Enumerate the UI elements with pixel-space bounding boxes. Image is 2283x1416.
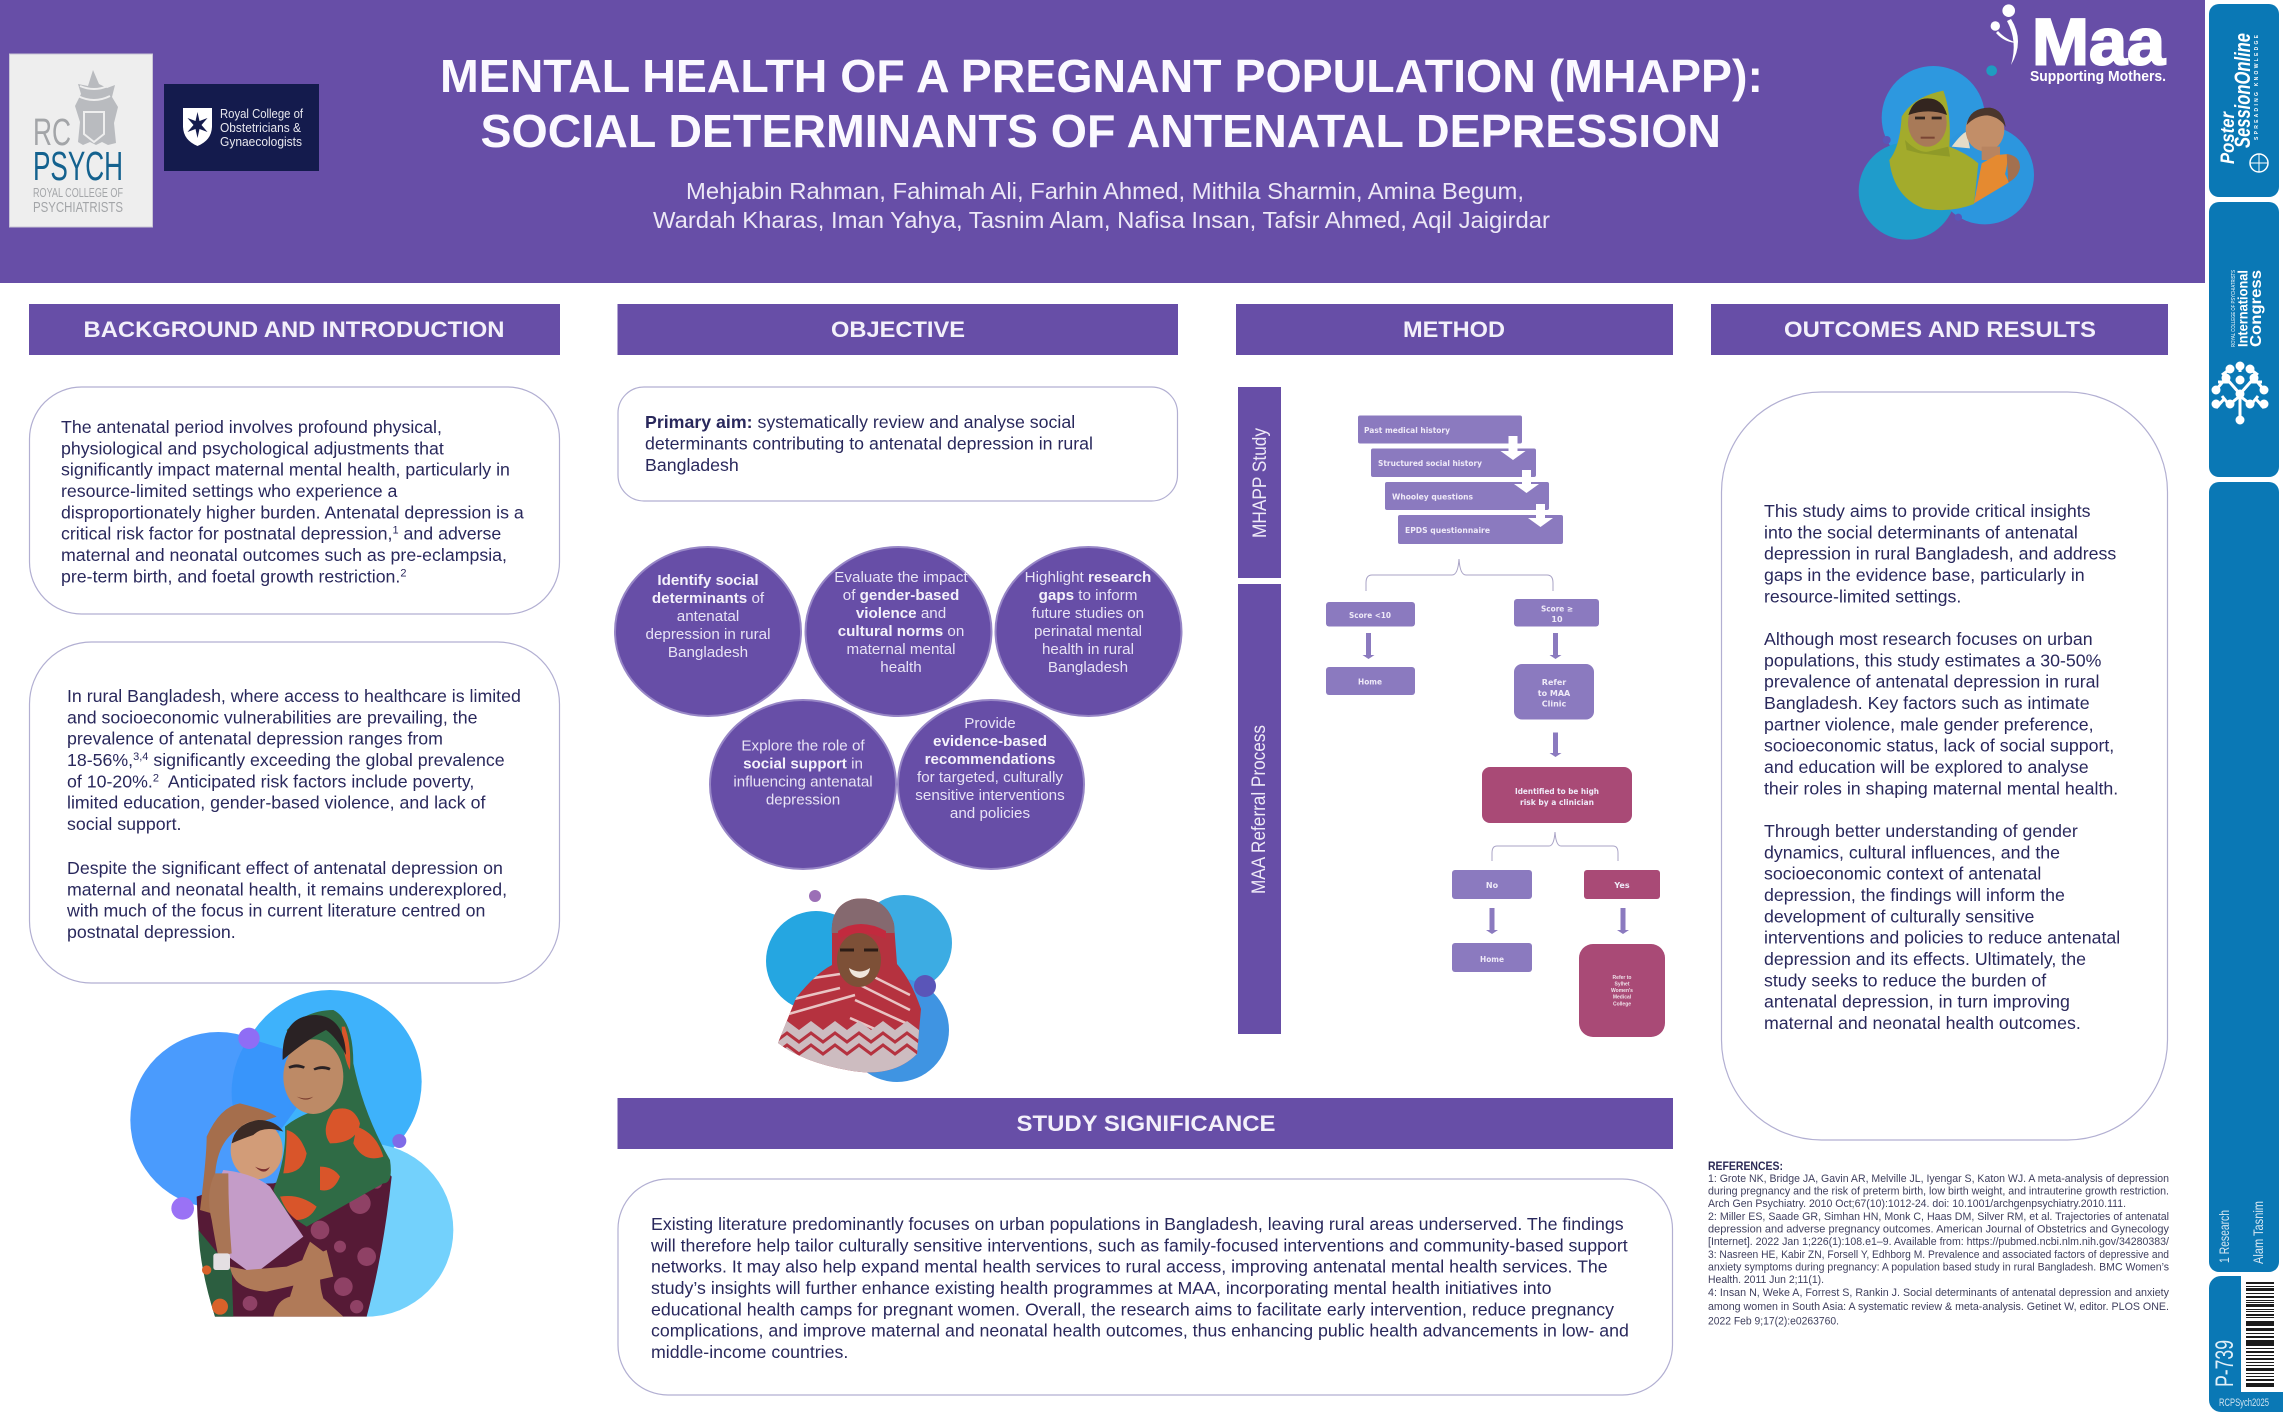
heading: method: METHOD [1403,317,1505,342]
text panel: significance: complications, and improve maternal and neonatal health outcomes, thus enhancing public health advancements in low- and [651,1321,1629,1341]
text panel: rural Bangladesh: Anticipated risk factors include poverty, [159,771,474,791]
heading: method [1236,304,1673,355]
text panel: rural Bangladesh: Despite the significant effect of antenatal depression on [67,858,503,878]
circle: highlight research gaps: to inform [1074,587,1137,604]
text panel: outcomes: into the social determinants of antenatal [1764,522,2078,542]
authors: Wardah Kharas, Iman Yahya, Tasnim Alam, Nafisa Insan, Tafsir Ahmed, Aqil Jaigirdar [653,207,1550,233]
tab: category and author: Alam Tasnim [2250,1201,2266,1264]
side label: MAA referral process [1238,584,1281,1034]
tab: poster number and barcode [2209,1276,2283,1412]
step: identified high risk [1482,767,1632,823]
step: past medical history: Past medical history [1364,426,1451,435]
circle: highlight research gaps: Bangladesh [1048,659,1128,676]
text panel: outcomes: prevalence of antenatal depression in rural [1764,672,2100,692]
heading: outcomes and results [1711,304,2168,355]
text panel: outcomes: development of culturally sensitive [1764,906,2034,926]
title: MENTAL HEALTH OF A PREGNANT POPULATION (MHAPP): [440,50,1763,102]
circle: provide recommendations: recommendations [925,751,1055,768]
step: home [1452,943,1532,972]
step: refer to Sylhet Women's Medical College: College [1613,1002,1631,1008]
tab: Poster Session Online: SPREADING KNOWLEDGE [2254,34,2260,140]
step: refer to Sylhet Women's Medical College: Medical [1613,994,1632,1000]
circle: evaluate the impact: Evaluate the impact [834,569,968,586]
tab: poster number and barcode: P-739 [2211,1340,2239,1387]
tab: Poster Session Online: Poster [2218,111,2239,164]
logo: Royal College of Psychiatrists: PSYCH [33,143,123,189]
step: score under 10: Score <10 [1349,611,1391,620]
text panel: rural Bangladesh: social support. [67,814,181,834]
text panel: significance: Existing literature predominantly focuses on urban populations in Bangladesh, leaving rural areas underserved. The findings [651,1214,1624,1234]
text panel: significance: networks. It may also help expand mental health services to rural access, improving antenatal mental health services. The [651,1257,1608,1277]
text panel: antenatal period: pre-term birth, and foetal growth restriction. [61,566,400,586]
circle: identify social determinants [615,547,801,716]
text panel: outcomes: Through better understanding of gender [1764,821,2078,841]
step: identified high risk: risk by a clinician [1520,798,1594,807]
heading: objective: OBJECTIVE [831,317,965,342]
authors [653,178,1550,233]
circle: evaluate the impact: gender-based [860,587,959,604]
tab: Poster Session Online [2209,4,2279,197]
text panel: primary aim: systematically review and analyse social [753,412,1075,432]
text panel: primary aim: Bangladesh [645,455,739,475]
circle: evaluate the impact: and [917,605,946,622]
circle: identify social determinants: determinants [652,590,747,607]
text panel: primary aim: determinants contributing to antenatal depression in rural [645,434,1093,454]
circle: highlight research gaps: health in rural [1042,641,1134,658]
step: score 10 or more [1514,599,1599,626]
circle: evaluate the impact: cultural norms [838,623,943,640]
circle: explore the role of social support [710,700,896,869]
objective circles [615,547,1182,869]
step: refer to MAA clinic [1514,664,1594,720]
step: yes [1584,870,1660,899]
step: home [1326,667,1415,695]
step: EPDS questionnaire [1398,515,1563,544]
text panel: outcomes [1722,392,2168,1140]
text panel: outcomes: dynamics, cultural influences, and the [1764,842,2060,862]
step: refer to Sylhet Women's Medical College: Women's [1611,988,1633,994]
side label: MAA referral process: MAA Referral Process [1249,725,1270,894]
text panel: outcomes: interventions and policies to reduce antenatal [1764,928,2120,948]
text panel: significance: study’s insights will further enhance existing health programmes at MAA, incorporating mental health initiatives into [651,1278,1552,1298]
tab: category and author [2209,482,2279,1272]
text panel: outcomes: study seeks to reduce the burden of [1764,970,2046,990]
references: 2022 Feb 9;17(2):e0263760. [1708,1316,1839,1328]
text panel: outcomes: This study aims to provide critical insights [1764,501,2091,521]
section: outcomes and results [1708,304,2170,1328]
title: SOCIAL DETERMINANTS OF ANTENATAL DEPRESSION [480,105,1721,157]
circle: identify social determinants: Bangladesh [668,644,748,661]
logo: Royal College of Obstetricians and Gynaecologists: Gynaecologists [220,135,302,149]
photo: mother and child on blue circles [1859,65,2034,240]
tab: International Congress: ROYAL COLLEGE OF PSYCHIATRISTS [2231,270,2237,347]
text panel: rural Bangladesh: prevalence of antenatal depression ranges from [67,729,443,749]
references: [Internet]. 2022 Jan 1;226(1):108.e1–9. Available from: https://pubmed.ncbi.nlm.nih.gov/34280383/ [1708,1236,2170,1248]
logo: Maa Supporting Mothers: Maa [2032,4,2166,78]
text panel: rural Bangladesh: significantly exceeding the global prevalence [148,750,505,770]
side label: MHAPP study: MHAPP Study [1250,428,1271,538]
circle: identify social determinants: antenatal [677,608,739,625]
step: refer to Sylhet Women's Medical College: Refer to [1613,975,1631,981]
text panel: antenatal period: The antenatal period involves profound physical, [61,417,442,437]
tab: International Congress [2209,202,2279,477]
heading: background and introduction: BACKGROUND AND INTRODUCTION [84,317,504,342]
text panel: rural Bangladesh: with much of the focus in current literature centred on [66,901,485,921]
circle: explore the role of social support: in [847,756,863,772]
logo: Royal College of Obstetricians and Gynaecologists: Obstetricians & [220,121,302,135]
heading: outcomes and results: OUTCOMES AND RESULTS [1784,317,2096,342]
text panel: rural Bangladesh: 3,4 [133,751,148,763]
text panel: significance: will therefore help tailor culturally sensitive interventions, such as family-focused interventions and community-based support [650,1235,1628,1255]
references: Arch Gen Psychiatry. 2010 Oct;67(10):1012-24. doi: 10.1001/archgenpsychiatry.2010.111. [1708,1198,2126,1210]
circle: evaluate the impact: maternal mental [847,641,955,658]
icon: network brain [2213,363,2267,423]
flowchart [1326,416,1665,1037]
circle: explore the role of social support: social support [743,756,847,772]
step: home: Home [1480,955,1505,964]
arrow: yes to referral [1617,908,1629,934]
circle: identify social determinants: of [747,590,765,607]
text panel: rural Bangladesh: postnatal depression. [67,922,236,942]
step: Whooley questions: Whooley questions [1392,492,1473,502]
barcode [2246,1282,2274,1387]
text panel: outcomes: depression and its effects. Ultimately, the [1764,949,2086,969]
text panel: outcomes: socioeconomic context of antenatal [1764,864,2041,884]
text panel: outcomes: Bangladesh. Key factors such as intimate [1764,693,2090,713]
text panel: outcomes: depression in rural Bangladesh, and address [1764,544,2116,564]
side label: MHAPP study [1238,387,1281,578]
step: yes: Yes [1613,881,1630,890]
circle: explore the role of social support: influencing antenatal [733,774,873,790]
section: objective [615,304,1182,1082]
tab: category and author: 1 Research [2216,1210,2232,1263]
references: 3: Nasreen HE, Kabir ZN, Forsell Y, Edhborg M. Prevalence and associated factors of depressive and [1708,1249,2169,1261]
text panel: primary aim [618,387,1178,501]
references: during pregnancy and the risk of preterm birth, low birth weight, and intrauterine growth restriction. [1708,1186,2169,1198]
bracket: score split [1366,559,1553,591]
title [440,50,1763,157]
circle: provide recommendations: for targeted, culturally [917,769,1063,786]
tab: International Congress: International [2234,270,2250,347]
tab: International Congress: Congress [2248,270,2265,347]
step: refer to MAA clinic: Clinic [1542,700,1567,708]
text panel: outcomes: Although most research focuses on urban [1764,629,2093,649]
circle: highlight research gaps: Highlight [1025,569,1088,586]
references: depression and adverse pregnancy outcomes. American Journal of Obstetrics and Gynecology [1708,1224,2169,1236]
circle: evaluate the impact [806,547,992,716]
text panel: antenatal period [30,387,560,614]
text panel: outcomes: depression, the findings will inform the [1764,885,2065,905]
arrow: score 10 to refer [1550,633,1562,659]
logo: Royal College of Obstetricians and Gynaecologists: Royal College of [220,107,303,121]
references: anxiety symptoms during pregnancy: A population based study in rural Bangladesh. BMC Women’s [1708,1262,2169,1274]
text panel: outcomes: gaps in the evidence base, particularly in [1764,565,2085,585]
step: refer to MAA clinic: Refer [1542,678,1566,687]
text panel: outcomes: antenatal depression, in turn improving [1764,992,2070,1012]
text panel: antenatal period: physiological and psychological adjustments that [61,438,444,458]
text panel: antenatal period: maternal and neonatal outcomes such as pre-eclampsia, [61,545,507,565]
text panel: rural Bangladesh: and socioeconomic vulnerabilities are prevailing, the [67,707,478,727]
circle: provide recommendations: sensitive interventions [915,787,1065,804]
authors: Mehjabin Rahman, Fahimah Ali, Farhin Ahmed, Mithila Sharmin, Amina Begum, [686,178,1524,204]
circle: provide recommendations: Provide [964,715,1016,732]
section: background and introduction [29,304,560,1317]
circle: identify social determinants: Identify social [657,572,759,589]
step: refer to MAA clinic: to MAA [1538,689,1571,698]
arrow: clinic to risk [1550,732,1562,757]
text panel: antenatal period: and adverse [399,524,501,544]
step: past medical history [1358,416,1522,444]
step: identified high risk: Identified to be high [1515,787,1599,796]
text panel: outcomes: resource-limited settings. [1764,586,1961,606]
text panel: rural Bangladesh: limited education, gender-based violence, and lack of [67,793,485,813]
circle: identify social determinants: depression in rural [646,626,770,643]
arrow: no to home [1486,908,1498,934]
text panel: antenatal period: critical risk factor for postnatal depression, [61,524,392,544]
circle: highlight research gaps [996,547,1182,716]
text panel: outcomes: their roles in shaping maternal mental health. [1764,778,2118,798]
step: structured social history [1371,448,1536,477]
heading: objective [618,304,1178,355]
references [1708,1161,2170,1328]
heading: study significance [618,1098,1673,1149]
circle: highlight research gaps: future studies on [1032,605,1144,622]
references: 4: Insan N, Weke A, Forrest S, Rankin J. Social determinants of antenatal depression and anxiety [1708,1287,2169,1299]
header banner [0,0,2205,283]
text panel: outcomes: partner violence, male gender preference, [1764,714,2094,734]
text panel: rural Bangladesh: 18-56%, [67,750,133,770]
text panel: rural Bangladesh: maternal and neonatal health, it remains underexplored, [67,879,507,899]
text panel: rural Bangladesh [30,642,560,983]
step: score 10 or more: Score ≥ [1541,604,1573,614]
text panel: antenatal period: 1 [392,525,399,537]
text panel: outcomes: populations, this study estimates a 30-50% [1764,650,2102,670]
references: Health. 2011 Jun 2;11(1). [1708,1274,1824,1286]
text panel: significance: educational health camps for pregnant women. Overall, the research aims to facilitate early intervention, reduce pregnancy [651,1299,1614,1319]
step: score under 10 [1326,602,1415,626]
section: study significance [618,1098,1673,1395]
arrows: white step arrows [1500,436,1553,527]
circle: evaluate the impact: of [843,587,860,604]
text panel: outcomes: and education will be explored to analyse [1764,757,2089,777]
text panel: rural Bangladesh: of 10-20%. [67,771,153,791]
logo: Royal College of Psychiatrists [10,54,152,227]
photo: smiling woman with red scarf on blue circles [766,890,952,1082]
step: no: No [1486,881,1499,890]
section: method [1236,304,1673,1037]
circle: evaluate the impact: health [880,659,922,676]
step: structured social history: Structured social history [1378,459,1483,468]
circle: evaluate the impact: on [943,623,964,640]
logo: Maa Supporting Mothers: Supporting Mothers. [2030,69,2166,85]
text panel: outcomes: maternal and neonatal health outcomes. [1764,1013,2081,1033]
circle: provide recommendations: evidence-based [933,733,1047,750]
circle: provide recommendations [898,700,1084,869]
references: 2: Miller ES, Saade GR, Simhan HN, Monk C, Haas DM, Silver RM, et al. Trajectories of antenatal [1708,1211,2169,1223]
photo: smiling mother holding baby on blue circles [130,990,453,1317]
step: refer to Sylhet Women's Medical College [1579,944,1665,1037]
sidebar [2209,4,2283,1412]
logo: Royal College of Psychiatrists: RC [33,112,71,154]
text panel: rural Bangladesh: In rural Bangladesh, where access to healthcare is limited [67,686,521,706]
circle: highlight research gaps: research [1088,569,1151,586]
logo: Royal College of Psychiatrists: ROYAL COLLEGE OF [33,185,123,200]
arrow: score under 10 to home [1362,633,1374,659]
text panel: primary aim: Primary aim: [645,412,753,432]
step: Whooley questions [1385,482,1549,510]
references: 1: Grote NK, Bridge JA, Gavin AR, Melville JL, Iyengar S, Katon WJ. A meta-analysis of depression [1708,1173,2169,1185]
text panel: outcomes: socioeconomic status, lack of social support, [1764,736,2114,756]
step: refer to Sylhet Women's Medical College: Sylhet [1614,982,1630,988]
circle: highlight research gaps: gaps [1039,587,1074,604]
step: score 10 or more: 10 [1551,615,1563,624]
heading: study significance: STUDY SIGNIFICANCE [1016,1111,1276,1136]
logo: Maa Supporting Mothers [1991,4,2166,85]
text panel: significance: middle-income countries. [651,1342,848,1362]
text panel: antenatal period: resource-limited settings who experience a [61,481,398,501]
circle: evaluate the impact: violence [856,605,917,622]
step: home: Home [1358,678,1383,686]
text panel: rural Bangladesh: 2 [153,772,159,784]
step: EPDS questionnaire: EPDS questionnaire [1405,526,1491,535]
circle: explore the role of social support: depression [766,792,840,808]
circle: provide recommendations: and policies [950,805,1031,822]
logo: Royal College of Psychiatrists: PSYCHIATRISTS [33,199,123,216]
heading: background and introduction [29,304,560,355]
bracket: risk split [1492,832,1618,861]
logo: Royal College of Obstetricians and Gynaecologists [164,84,319,171]
circle: explore the role of social support: Explore the role of [741,738,865,754]
text panel: antenatal period: significantly impact maternal mental health, particularly in [61,460,510,480]
references: among women in South Asia: A systematic review & meta-analysis. Getinet W, editor. PLOS ONE. [1708,1301,2169,1313]
circle: highlight research gaps: perinatal mental [1034,623,1142,640]
text panel: antenatal period: 2 [400,567,406,579]
text panel: antenatal period: disproportionately higher burden. Antenatal depression is a [61,502,524,522]
step: no [1452,870,1532,899]
text panel: significance [618,1179,1672,1395]
references: REFERENCES: [1708,1161,1783,1173]
